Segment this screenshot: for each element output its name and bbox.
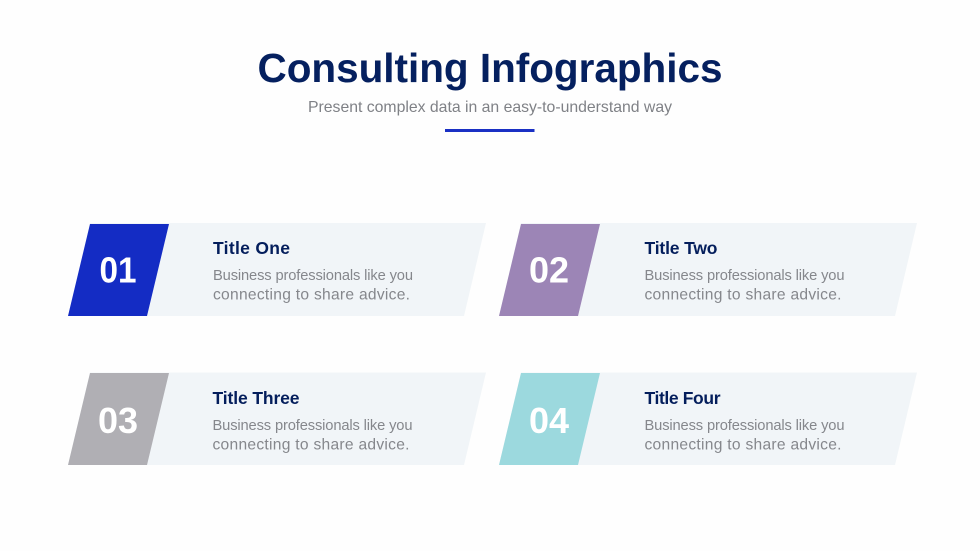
title underline <box>445 129 534 132</box>
card two background <box>499 223 917 316</box>
card four body text: Business professionals like you <box>644 418 844 434</box>
card one number tab <box>68 224 169 316</box>
card three heading: Title Three <box>212 388 300 408</box>
panel: card one <box>68 223 486 316</box>
card one body text: connecting to share advice. <box>213 286 410 304</box>
card three number tab <box>68 373 169 465</box>
card three body text: connecting to share advice. <box>212 436 410 454</box>
card four number: 04 <box>529 400 569 441</box>
card four background <box>499 372 917 465</box>
card one number: 01 <box>100 250 136 290</box>
card three number: 03 <box>98 400 138 441</box>
card two number: 02 <box>529 250 569 290</box>
title: Consulting Infographics <box>258 45 722 91</box>
card four heading: Title Four <box>644 388 721 408</box>
panel: card four <box>499 372 917 465</box>
card four body text: connecting to share advice. <box>644 436 842 454</box>
card two body text: connecting to share advice. <box>644 286 842 304</box>
card two number tab <box>499 224 600 316</box>
card three body text: Business professionals like you <box>212 418 412 434</box>
panel: card three <box>68 372 486 465</box>
card one background <box>68 223 486 316</box>
card one body text: Business professionals like you <box>213 268 413 284</box>
card four number tab <box>499 373 600 465</box>
card one heading: Title One <box>213 238 290 258</box>
card two heading: Title Two <box>644 238 718 258</box>
card three background <box>68 372 486 465</box>
card two body text: Business professionals like you <box>644 268 844 284</box>
panel: card two <box>499 223 917 316</box>
subtitle: Present complex data in an easy-to-understand way <box>308 99 672 116</box>
